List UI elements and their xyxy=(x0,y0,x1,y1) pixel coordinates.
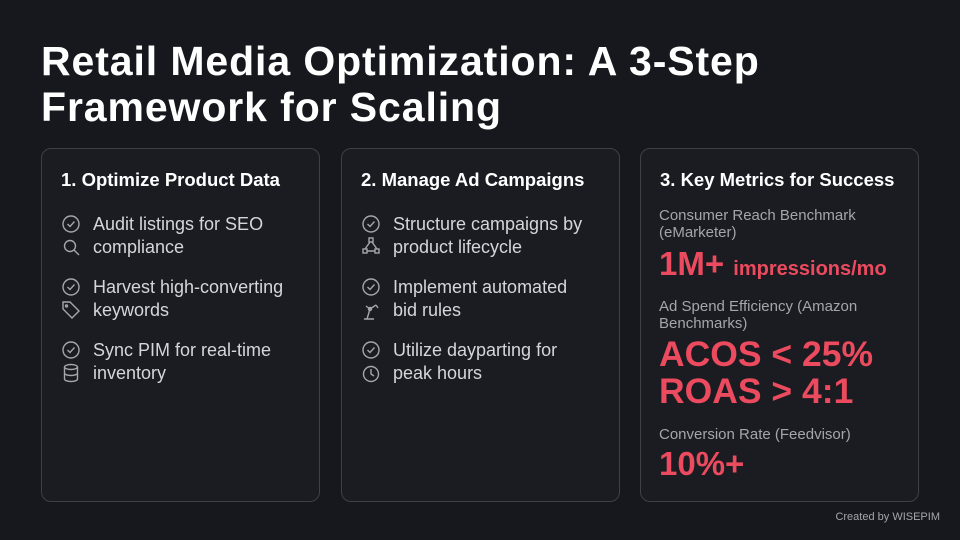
item: audit: Audit listings for SEO xyxy=(93,214,263,234)
title xyxy=(41,38,760,130)
metric label: consumer reach: Consumer Reach Benchmark xyxy=(659,207,856,224)
credit: Created by WISEPIM xyxy=(835,511,940,523)
item: harvest: keywords xyxy=(93,300,169,320)
metric value: ACOS/ROAS xyxy=(659,334,873,411)
item: dayparting: peak hours xyxy=(393,363,482,383)
item: automated bid rules: bid rules xyxy=(393,300,461,320)
item: sync: Sync PIM for real-time xyxy=(93,340,271,360)
metric label: ad spend: Ad Spend Efficiency (Amazon xyxy=(659,298,857,315)
metric label: conversion: Conversion Rate (Feedvisor) xyxy=(659,426,851,443)
panel: optimize product data xyxy=(41,148,320,502)
metric label: ad spend: Benchmarks) xyxy=(659,315,747,332)
panel: manage ad campaigns xyxy=(341,148,620,502)
item: harvest xyxy=(62,277,283,320)
item: dayparting xyxy=(362,340,557,383)
metric value: ACOS/ROAS: ROAS > 4:1 xyxy=(659,371,853,411)
item: harvest: Harvest high-converting xyxy=(93,277,283,297)
metric value: ACOS/ROAS: ACOS < 25% xyxy=(659,334,873,374)
heading: 2. Manage Ad Campaigns xyxy=(361,169,584,190)
item: audit: compliance xyxy=(93,237,184,257)
title: Retail Media Optimization: A 3-Step xyxy=(41,38,760,84)
panel: key metrics xyxy=(640,148,919,502)
item: sync xyxy=(62,340,271,383)
heading: 1. Optimize Product Data xyxy=(61,169,280,190)
item: audit xyxy=(62,214,263,257)
item: structure xyxy=(362,214,582,257)
item: sync: inventory xyxy=(93,363,166,383)
item: structure: Structure campaigns by xyxy=(393,214,582,234)
item: dayparting: Utilize dayparting for xyxy=(393,340,557,360)
item: automated bid rules xyxy=(362,277,567,320)
title: Framework for Scaling xyxy=(41,84,502,130)
heading: 3. Key Metrics for Success xyxy=(660,169,894,190)
metric label: consumer reach: (eMarketer) xyxy=(659,224,737,241)
item: structure: product lifecycle xyxy=(393,237,522,257)
item: automated bid rules: Implement automated xyxy=(393,277,567,297)
metric label: consumer reach xyxy=(659,207,856,241)
metric label: ad spend xyxy=(659,298,857,332)
metric value: 10%+: 10%+ xyxy=(659,445,744,482)
metric value: 1M+: 1M+ impressions/mo xyxy=(659,245,887,282)
